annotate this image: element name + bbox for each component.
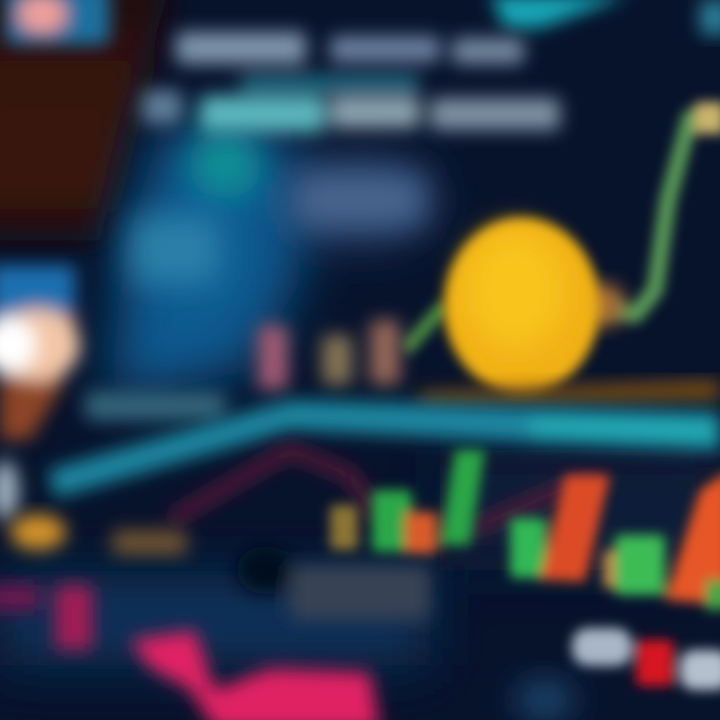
title: [142, 32, 560, 132]
left orange-white light burst: [0, 265, 80, 520]
title line 1: [176, 32, 524, 64]
candlestick chart: [330, 450, 720, 610]
dark centre block: [237, 546, 430, 620]
horizon amber glow: [420, 380, 720, 405]
small candlesticks above band: [85, 320, 400, 420]
top teal accent: [490, 0, 720, 35]
pink area chart: [0, 585, 380, 720]
line chart: green trend: [405, 112, 720, 350]
dark red line: [170, 450, 600, 530]
icon: gold coin: [444, 218, 625, 394]
title line 2: [142, 75, 560, 132]
teal light spot: [189, 131, 261, 199]
subtitle text blur: [130, 175, 425, 285]
panel: central blue glow: [0, 130, 720, 665]
bottom-right pills: [572, 628, 720, 690]
icon: top-left logo blob: [5, 0, 110, 45]
left orange labels: [10, 514, 187, 555]
panel: left brown glow: [0, 0, 175, 240]
teal band: [48, 400, 720, 498]
bottom dark blue smudge: [515, 678, 575, 720]
